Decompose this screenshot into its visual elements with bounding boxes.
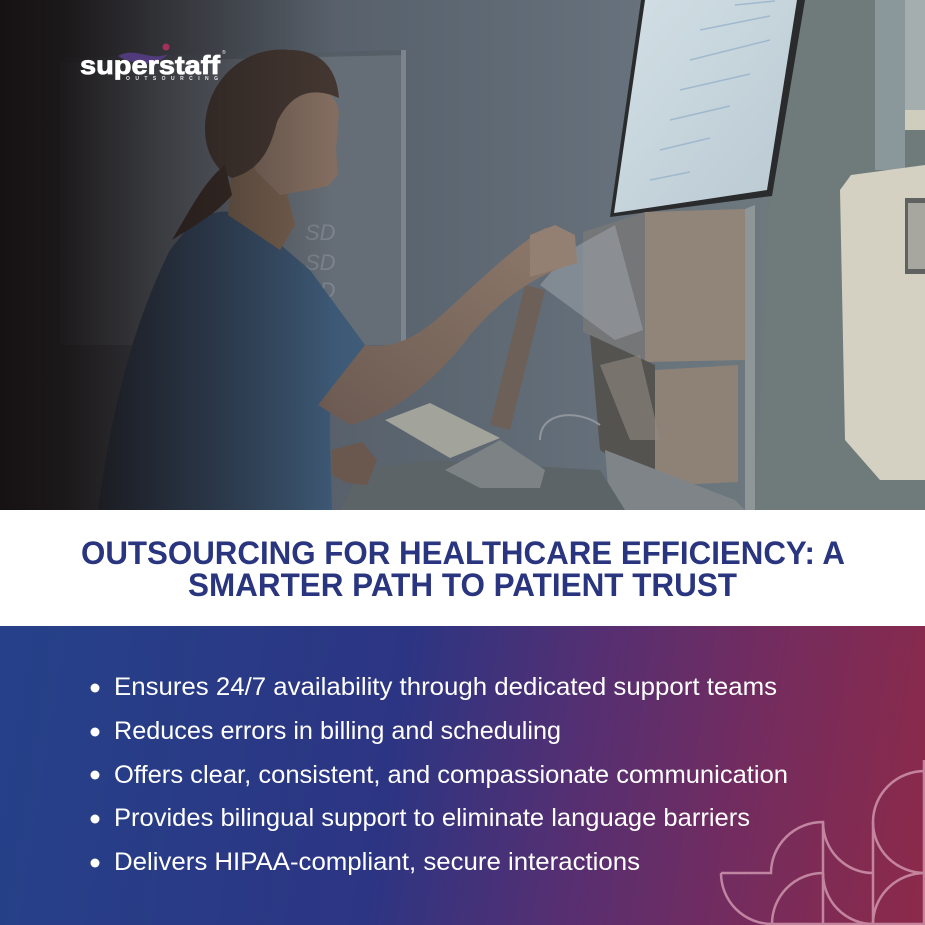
photo: nurse at a workstation xyxy=(0,0,925,510)
bullet 5: Delivers HIPAA-compliant, secure interactions xyxy=(114,848,640,876)
logo: ® xyxy=(222,49,226,56)
title band xyxy=(0,510,925,626)
face xyxy=(255,80,339,195)
scrub top xyxy=(98,211,365,510)
title text xyxy=(81,535,845,603)
dark left fade xyxy=(0,0,925,510)
bullet 4: Provides bilingual support to eliminate language barriers xyxy=(114,804,750,832)
whiteboard behind nurse: SD xyxy=(305,250,336,275)
whiteboard behind nurse xyxy=(60,50,406,350)
raised arm xyxy=(318,228,575,425)
title text: OUTSOURCING FOR HEALTHCARE EFFICIENCY: A xyxy=(81,535,845,571)
lower hand xyxy=(332,442,377,485)
desk and keyboard xyxy=(340,285,625,510)
wall-mounted screen xyxy=(610,0,805,217)
right wall xyxy=(755,0,925,510)
decorative arc pattern xyxy=(721,760,925,925)
bullet 2: Reduces errors in billing and scheduling xyxy=(114,717,561,745)
nurse xyxy=(98,50,577,510)
logo xyxy=(80,44,226,82)
ponytail xyxy=(172,165,232,240)
bullet 1: Ensures 24/7 availability through dedicated support teams xyxy=(114,673,777,701)
neck xyxy=(228,165,295,250)
title text: SMARTER PATH TO PATIENT TRUST xyxy=(188,567,737,603)
logo: OUTSOURCING xyxy=(126,76,218,82)
logo: superstaff xyxy=(80,50,220,80)
cream wall device xyxy=(840,110,925,480)
hair xyxy=(205,50,339,178)
gradient panel: benefits xyxy=(0,626,925,925)
upper tan storage bin xyxy=(540,205,755,510)
benefits list xyxy=(90,673,788,876)
whiteboard behind nurse: SD xyxy=(305,278,336,303)
hand and fingers xyxy=(530,225,577,277)
whiteboard behind nurse: SD xyxy=(305,220,336,245)
lower tan storage bin xyxy=(590,335,745,510)
bullet 3: Offers clear, consistent, and compassionate communication xyxy=(114,761,788,789)
